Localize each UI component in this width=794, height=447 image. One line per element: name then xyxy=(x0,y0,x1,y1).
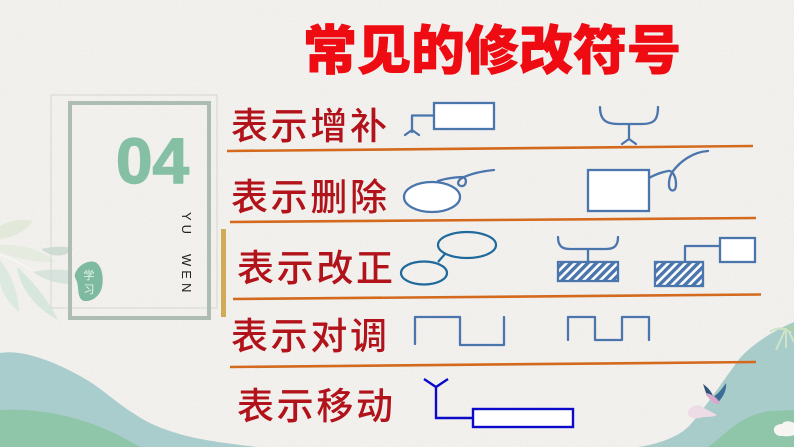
gold accent bar xyxy=(221,229,226,317)
bottom-right hills xyxy=(638,322,794,447)
badge: study xyxy=(75,262,103,301)
vertical label YU WEN: YU xyxy=(179,212,194,238)
symbol: delete ellipse xyxy=(404,170,494,212)
decorative leaves xyxy=(0,220,73,320)
symbol: move xyxy=(424,379,573,427)
cloud: white xyxy=(774,421,794,436)
leaf sprig xyxy=(770,325,794,350)
frame: thin outer xyxy=(51,95,217,308)
badge: study: 学 xyxy=(84,267,94,283)
section number: 04 xyxy=(116,125,189,197)
bottom-left hills xyxy=(0,352,257,447)
symbol: swap wide xyxy=(415,317,504,345)
cloud: pink xyxy=(688,405,717,418)
symbol: delete box xyxy=(588,151,708,211)
symbol: add with bracket xyxy=(600,107,658,144)
row label: move: 表示移动 xyxy=(237,386,393,427)
symbol: correct hatched with box xyxy=(655,238,755,286)
symbol: correct hatched with bracket xyxy=(558,237,618,281)
badge: study: 习 xyxy=(84,281,94,297)
frame: thick inner xyxy=(70,103,209,318)
row label: correct: 表示改正 xyxy=(237,248,393,289)
vertical label YU WEN: WEN xyxy=(179,254,194,296)
row label: swap: 表示对调 xyxy=(231,316,387,357)
symbol: correct ellipses xyxy=(401,232,496,284)
vertical label YU WEN xyxy=(179,212,194,296)
symbol: add with box xyxy=(405,103,494,135)
title: 常见的修改符号 xyxy=(303,22,681,81)
bird xyxy=(703,383,726,404)
row label: add: 表示增补 xyxy=(231,106,387,147)
divider lines xyxy=(227,146,761,367)
row label: delete: 表示删除 xyxy=(231,177,387,218)
symbol: swap narrow xyxy=(568,317,649,340)
